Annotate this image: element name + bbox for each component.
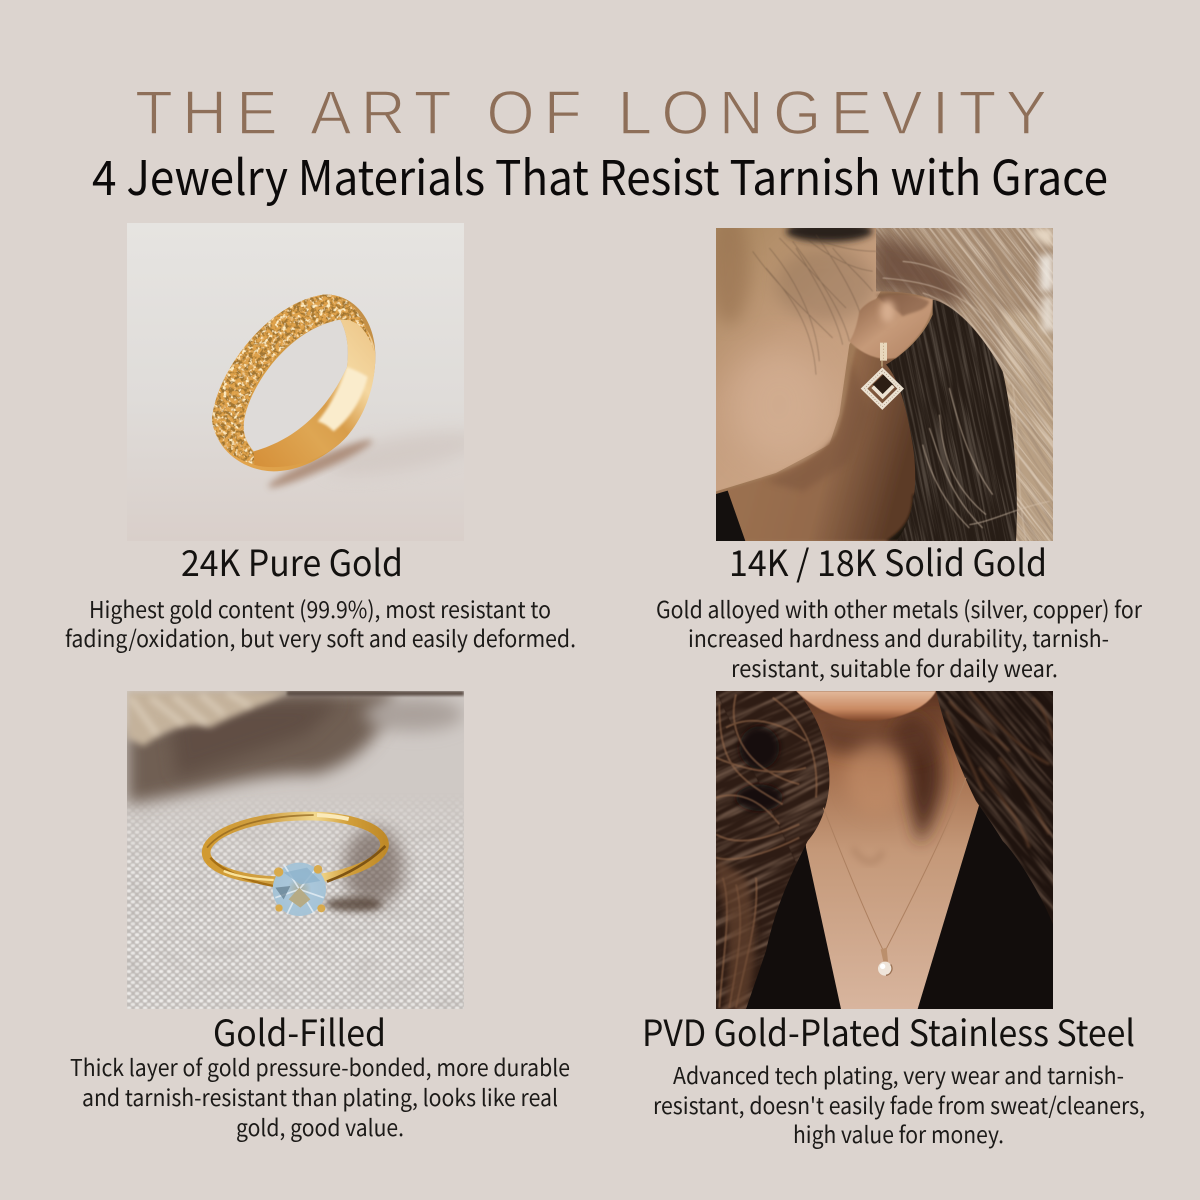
description: PVD gold-plated stainless steel — [653, 1057, 1145, 1150]
heading: Gold-Filled: Gold-Filled — [213, 1005, 386, 1057]
heading: 14K / 18K Solid Gold: 14K / 18K Solid Gold — [729, 535, 1047, 587]
description: 14K / 18K solid gold: resistant, suitable for daily wear. — [731, 650, 1058, 684]
description: 14K / 18K solid gold — [656, 591, 1142, 684]
title: THE ART OF LONGEVITY — [135, 79, 1047, 148]
heading: 24K Pure Gold: 24K Pure Gold — [181, 535, 403, 587]
hair: left side — [716, 691, 830, 1009]
description: 24K pure gold: Highest gold content (99.9%), most resistant to — [89, 591, 551, 625]
image: aquamarine solitaire ring on linen — [127, 691, 464, 1009]
panel: gold-filled — [70, 691, 570, 1143]
description: PVD gold-plated stainless steel: Advanced tech plating, very wear and tarnish- — [673, 1057, 1124, 1091]
description: PVD gold-plated stainless steel: resistant, doesn't easily fade from sweat/cleaners, — [653, 1087, 1145, 1121]
description: 14K / 18K solid gold: increased hardness and durability, tarnish- — [688, 620, 1109, 654]
earring — [864, 343, 901, 407]
panel: 14K / 18K solid gold — [656, 211, 1142, 684]
hair: dark under layer — [886, 300, 1017, 541]
description: 24K pure gold: fading/oxidation, but very soft and easily deformed. — [65, 620, 576, 654]
hair: right side — [936, 691, 1053, 924]
description: PVD gold-plated stainless steel: high value for money. — [793, 1116, 1004, 1150]
panel: 24K pure gold — [65, 223, 576, 654]
image: diamond drop earring — [716, 228, 1053, 541]
heading: PVD Gold-Plated Stainless Steel: PVD Gold-Plated Stainless Steel — [642, 1005, 1135, 1057]
panel: PVD gold-plated stainless steel — [642, 691, 1145, 1150]
hair: upper and outer tan lengths — [876, 228, 1053, 541]
image: pearl pendant necklace — [716, 691, 1053, 1009]
description: gold-filled: Thick layer of gold pressure-bonded, more durable — [70, 1049, 570, 1083]
description: 24K pure gold — [65, 591, 576, 654]
description: 14K / 18K solid gold: Gold alloyed with other metals (silver, copper) for — [656, 591, 1142, 625]
description: gold-filled: gold, good value. — [236, 1109, 404, 1143]
description: gold-filled — [70, 1049, 570, 1143]
image: textured gold ring — [127, 223, 464, 492]
description: gold-filled: and tarnish-resistant than plating, looks like real — [82, 1079, 558, 1113]
subtitle: 4 Jewelry Materials That Resist Tarnish with Grace — [92, 139, 1108, 209]
